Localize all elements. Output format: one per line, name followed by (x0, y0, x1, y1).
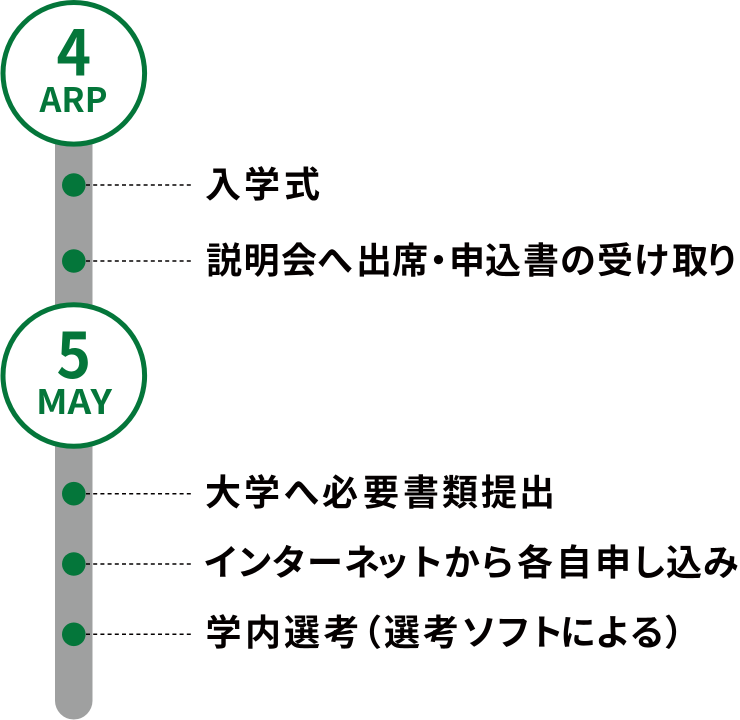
month badge: April: 4 (57, 2, 91, 94)
event: submit documents: 大学へ必要書類提出 (205, 464, 555, 516)
event: entrance ceremony (62, 156, 320, 208)
month badge: May (3, 304, 145, 446)
event: internal selection: 学内選考（選考ソフトによる） (206, 604, 700, 656)
month badge: May: MAY (36, 375, 112, 424)
month badge: April: ARP (38, 73, 108, 122)
event: information session: 説明会へ出席・申込書の受け取り (206, 232, 740, 284)
month badge: April (3, 2, 145, 144)
event: internet application: インターネットから各自申し込み (203, 534, 739, 586)
month badge: May: 5 (57, 304, 91, 397)
timeline bar (55, 100, 92, 720)
event: entrance ceremony: 入学式 (205, 156, 320, 208)
